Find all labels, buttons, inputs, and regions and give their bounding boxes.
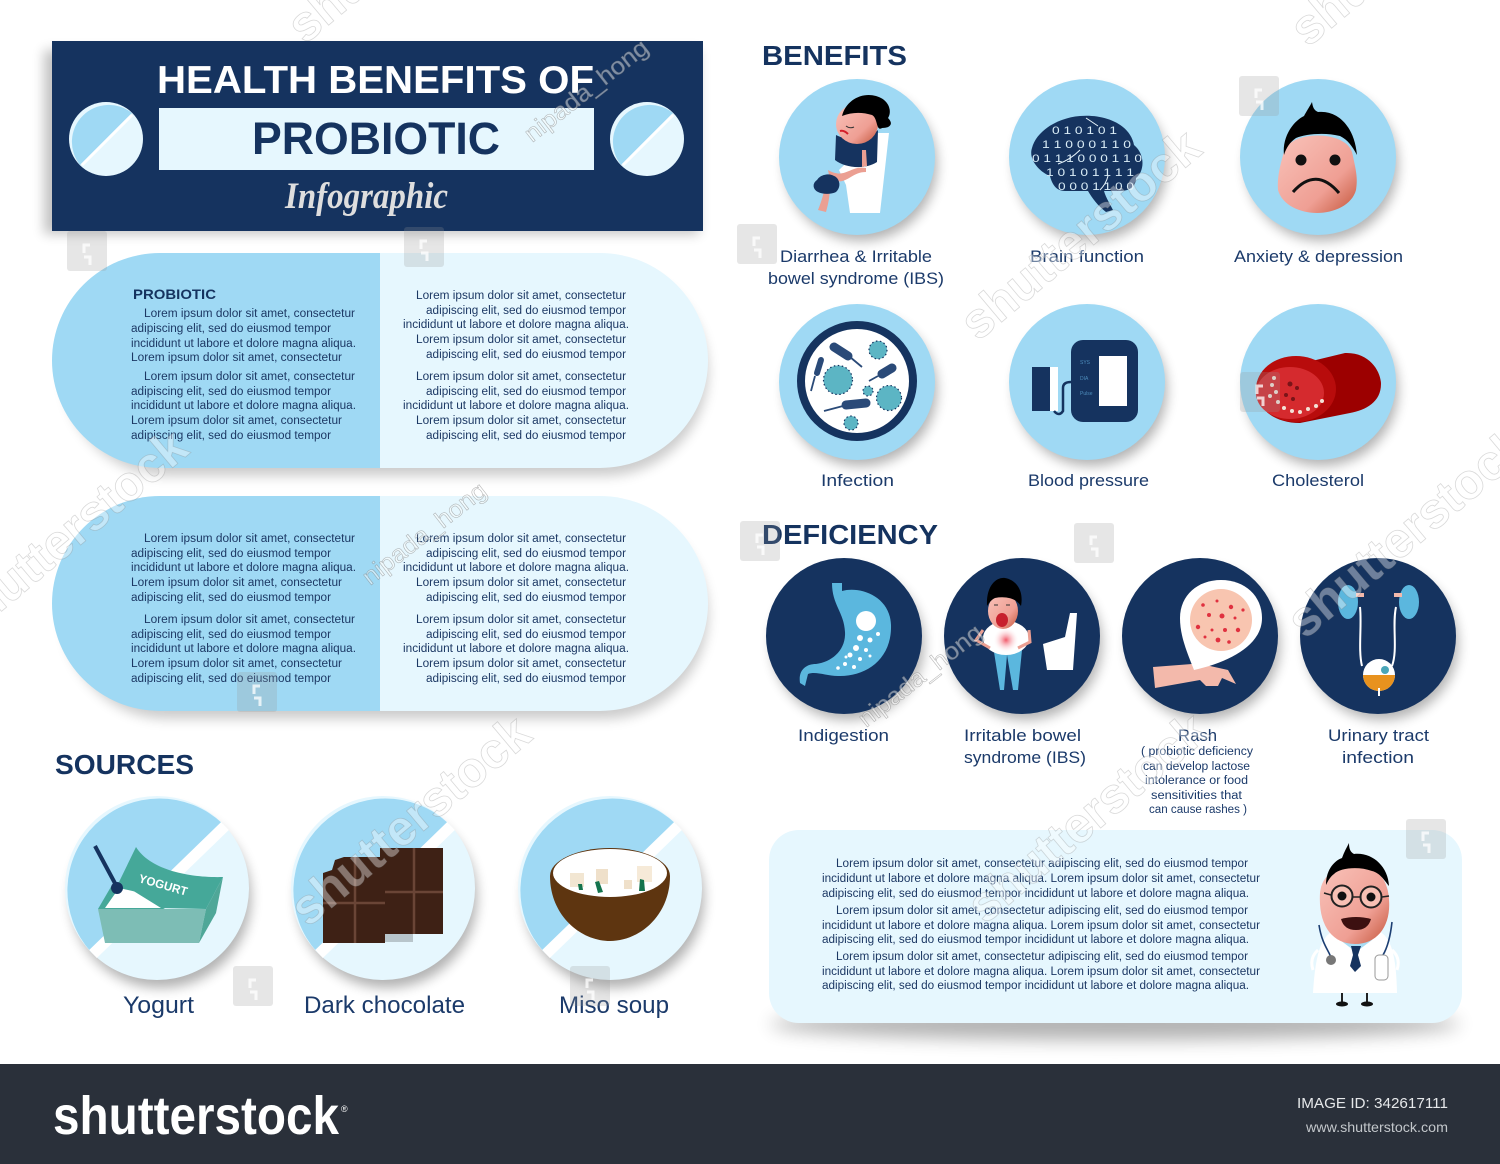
left text block: Lorem ipsum dolor sit amet, consectetur [144, 614, 355, 626]
label: Cholesterol [1272, 471, 1364, 490]
right text block: Lorem ipsum dolor sit amet, consectetur [416, 614, 626, 626]
left text block: adipiscing elit, sed do eiusmod tempor [131, 386, 331, 398]
right text block [403, 533, 629, 685]
left text block: incididunt ut labore et dolore magna aliqua. [131, 338, 356, 350]
title banner [44, 41, 703, 234]
icon: binary brain: 0 1 0 1 0 1 [1052, 125, 1117, 137]
pill heading: PROBIOTIC [133, 286, 216, 302]
right text block: Lorem ipsum dolor sit amet, consectetur [416, 371, 626, 383]
label: Dark chocolate [304, 992, 465, 1019]
heading: benefits: BENEFITS [762, 40, 907, 71]
panel: doctor note [769, 830, 1462, 1040]
label: Urinary tract [1328, 726, 1429, 745]
right text block: adipiscing elit, sed do eiusmod tempor [426, 430, 626, 442]
source: yogurt [65, 796, 251, 1019]
title word probiotic: PROBIOTIC [252, 113, 500, 164]
left text block: adipiscing elit, sed do eiusmod tempor [131, 629, 331, 641]
deficiency: indigestion [766, 558, 924, 745]
left text block: adipiscing elit, sed do eiusmod tempor [131, 673, 331, 685]
right text block: Lorem ipsum dolor sit amet, consectetur [416, 533, 626, 545]
deficiency: rash [1122, 558, 1280, 816]
icon: doctor [1312, 843, 1398, 1006]
benefit: anxiety [1234, 79, 1403, 266]
right text block: adipiscing elit, sed do eiusmod tempor [426, 673, 626, 685]
watermark overlay: shutterstock [949, 118, 1211, 350]
label: Infection [821, 471, 894, 490]
right text block: Lorem ipsum dolor sit amet, consectetur [416, 658, 626, 670]
title box [159, 108, 594, 170]
left text block: Lorem ipsum dolor sit amet, consectetur [144, 308, 355, 320]
label: Diarrhea & Irritable [780, 247, 932, 266]
label: Rash [1178, 726, 1217, 745]
rash note [1141, 746, 1253, 816]
deficiency: urinary tract infection [1300, 558, 1458, 767]
watermark overlay: nipada_hong [357, 477, 492, 591]
left text block: incididunt ut labore et dolore magna aliqua. [131, 562, 356, 574]
heading: deficiency: DEFICIENCY [762, 519, 938, 550]
watermark overlay: shutterstock [956, 701, 1218, 933]
right text block: Lorem ipsum dolor sit amet, consectetur [416, 290, 626, 302]
left text block: Lorem ipsum dolor sit amet, consectetur [131, 415, 342, 427]
footer logo: shutterstock [53, 1086, 340, 1146]
label: Yogurt [123, 992, 194, 1019]
note text: adipiscing elit, sed do eiusmod tempor incididunt ut labore et dolore magna aliqua. [822, 888, 1249, 900]
note text: incididunt ut labore et dolore magna aliqua. Lorem ipsum dolor sit amet, consectetur [822, 873, 1260, 885]
note text: incididunt ut labore et dolore magna aliqua. Lorem ipsum dolor sit amet, consectetur [822, 966, 1260, 978]
icon: binary brain: 1 0 1 0 1 1 1 1 [1046, 167, 1134, 179]
watermark overlay: nipada_hong [853, 619, 988, 733]
right text block: incididunt ut labore et dolore magna aliqua. [403, 643, 629, 655]
benefit: diarrhea [768, 79, 944, 288]
watermark overlay: shutterstock [279, 704, 541, 936]
right text block: adipiscing elit, sed do eiusmod tempor [426, 592, 626, 604]
note text [822, 858, 1260, 992]
icon: binary brain: 1 1 0 0 0 1 1 0 [1042, 139, 1131, 151]
note text: incididunt ut labore et dolore magna aliqua. Lorem ipsum dolor sit amet, consectetur [822, 920, 1260, 932]
note text: Lorem ipsum dolor sit amet, consectetur adipiscing elit, sed do eiusmod tempor [836, 858, 1248, 870]
icon: yogurt cup: YOGURT [137, 871, 190, 899]
right text block: adipiscing elit, sed do eiusmod tempor [426, 386, 626, 398]
icon: right pill [610, 102, 684, 176]
icon: binary brain: 0 0 0 1 1 0 0 [1058, 181, 1134, 193]
panel: first text pill [52, 253, 708, 476]
benefit: cholesterol [1240, 304, 1398, 490]
icon: hand with rash [1153, 580, 1262, 688]
left text block: adipiscing elit, sed do eiusmod tempor [131, 548, 331, 560]
icon: blood pressure monitor: Pulse [1080, 391, 1093, 397]
left text block: Lorem ipsum dolor sit amet, consectetur [131, 658, 342, 670]
label: Indigestion [798, 726, 889, 745]
icon: blood pressure monitor: SYS [1080, 360, 1091, 366]
right text block: Lorem ipsum dolor sit amet, consectetur [416, 334, 626, 346]
icon: stomach [800, 583, 891, 686]
note text: Lorem ipsum dolor sit amet, consectetur adipiscing elit, sed do eiusmod tempor [836, 951, 1248, 963]
note text: Lorem ipsum dolor sit amet, consectetur adipiscing elit, sed do eiusmod tempor [836, 905, 1248, 917]
note text: adipiscing elit, sed do eiusmod tempor incididunt ut labore et dolore magna aliqua. [822, 980, 1249, 992]
right text block: adipiscing elit, sed do eiusmod tempor [426, 349, 626, 361]
deficiency: irritable bowel syndrome [944, 558, 1102, 767]
footer registered mark: ® [341, 1104, 348, 1114]
label: Blood pressure [1028, 471, 1149, 490]
left text block: Lorem ipsum dolor sit amet, consectetur [144, 371, 355, 383]
subtitle: Infographic [284, 176, 448, 217]
right text block: incididunt ut labore et dolore magna aliqua. [403, 400, 629, 412]
icon: petri dish [801, 325, 913, 437]
source: miso soup [518, 796, 704, 1019]
right text block: Lorem ipsum dolor sit amet, consectetur [416, 577, 626, 589]
rash note: can develop lactose [1143, 761, 1250, 773]
label: Miso soup [559, 992, 669, 1019]
left text block [131, 308, 356, 442]
right text block: adipiscing elit, sed do eiusmod tempor [426, 548, 626, 560]
left text block: incididunt ut labore et dolore magna aliqua. [131, 400, 356, 412]
icon: woman on toilet [814, 95, 891, 213]
icon: sick person and toilet [976, 578, 1077, 690]
right text block: incididunt ut labore et dolore magna aliqua. [403, 319, 629, 331]
icon: soup bowl [550, 848, 670, 941]
rash note: can cause rashes ) [1149, 804, 1247, 816]
benefit: blood pressure [1009, 304, 1167, 490]
icon: yogurt cup [95, 846, 223, 943]
right text block: adipiscing elit, sed do eiusmod tempor [426, 305, 626, 317]
rash note: ( probiotic deficiency [1141, 746, 1253, 758]
icon: blood pressure monitor [1032, 340, 1138, 422]
right text block [403, 290, 629, 442]
icon: binary brain [1031, 116, 1142, 212]
icon: urinary tract [1338, 585, 1419, 696]
source: dark chocolate [291, 796, 477, 1019]
icon: clogged artery [1256, 353, 1381, 423]
icon: blood pressure monitor: DIA [1080, 376, 1089, 382]
left text block [131, 533, 356, 685]
left text block: Lorem ipsum dolor sit amet, consectetur [131, 352, 342, 364]
left text block: adipiscing elit, sed do eiusmod tempor [131, 430, 331, 442]
left text block: adipiscing elit, sed do eiusmod tempor [131, 323, 331, 335]
rash note: sensitivities that [1151, 790, 1243, 802]
rash note: intolerance or food [1145, 775, 1248, 787]
left text block: incididunt ut labore et dolore magna aliqua. [131, 643, 356, 655]
label: Irritable bowel [964, 726, 1081, 745]
label line two: bowel syndrome (IBS) [768, 269, 944, 288]
title line one: HEALTH BENEFITS OF [157, 59, 594, 102]
icon: sad face [1278, 102, 1357, 213]
label: Anxiety & depression [1234, 247, 1403, 266]
label line two: syndrome (IBS) [964, 748, 1086, 767]
icon: binary brain: 0 1 1 1 0 0 0 1 1 0 [1032, 153, 1142, 165]
right text block: Lorem ipsum dolor sit amet, consectetur [416, 415, 626, 427]
benefit: brain function [1009, 79, 1167, 266]
right text block: adipiscing elit, sed do eiusmod tempor [426, 629, 626, 641]
panel: second text pill [52, 496, 708, 719]
heading: sources: SOURCES [55, 749, 194, 780]
left text block: Lorem ipsum dolor sit amet, consectetur [131, 577, 342, 589]
right text block: incididunt ut labore et dolore magna aliqua. [403, 562, 629, 574]
label: Brain function [1030, 247, 1144, 266]
icon: left pill [69, 102, 143, 176]
website: www.shutterstock.com [1305, 1119, 1448, 1135]
benefit: infection [779, 304, 937, 490]
label line two: infection [1342, 748, 1414, 767]
left text block: Lorem ipsum dolor sit amet, consectetur [144, 533, 355, 545]
left text block: adipiscing elit, sed do eiusmod tempor [131, 592, 331, 604]
watermark overlay: nipada_hong [519, 34, 654, 148]
note text: adipiscing elit, sed do eiusmod tempor incididunt ut labore et dolore magna aliqua. [822, 934, 1249, 946]
icon: chocolate bars [323, 848, 443, 943]
image id: IMAGE ID: 342617111 [1297, 1095, 1448, 1112]
footer bar [0, 1064, 1500, 1164]
